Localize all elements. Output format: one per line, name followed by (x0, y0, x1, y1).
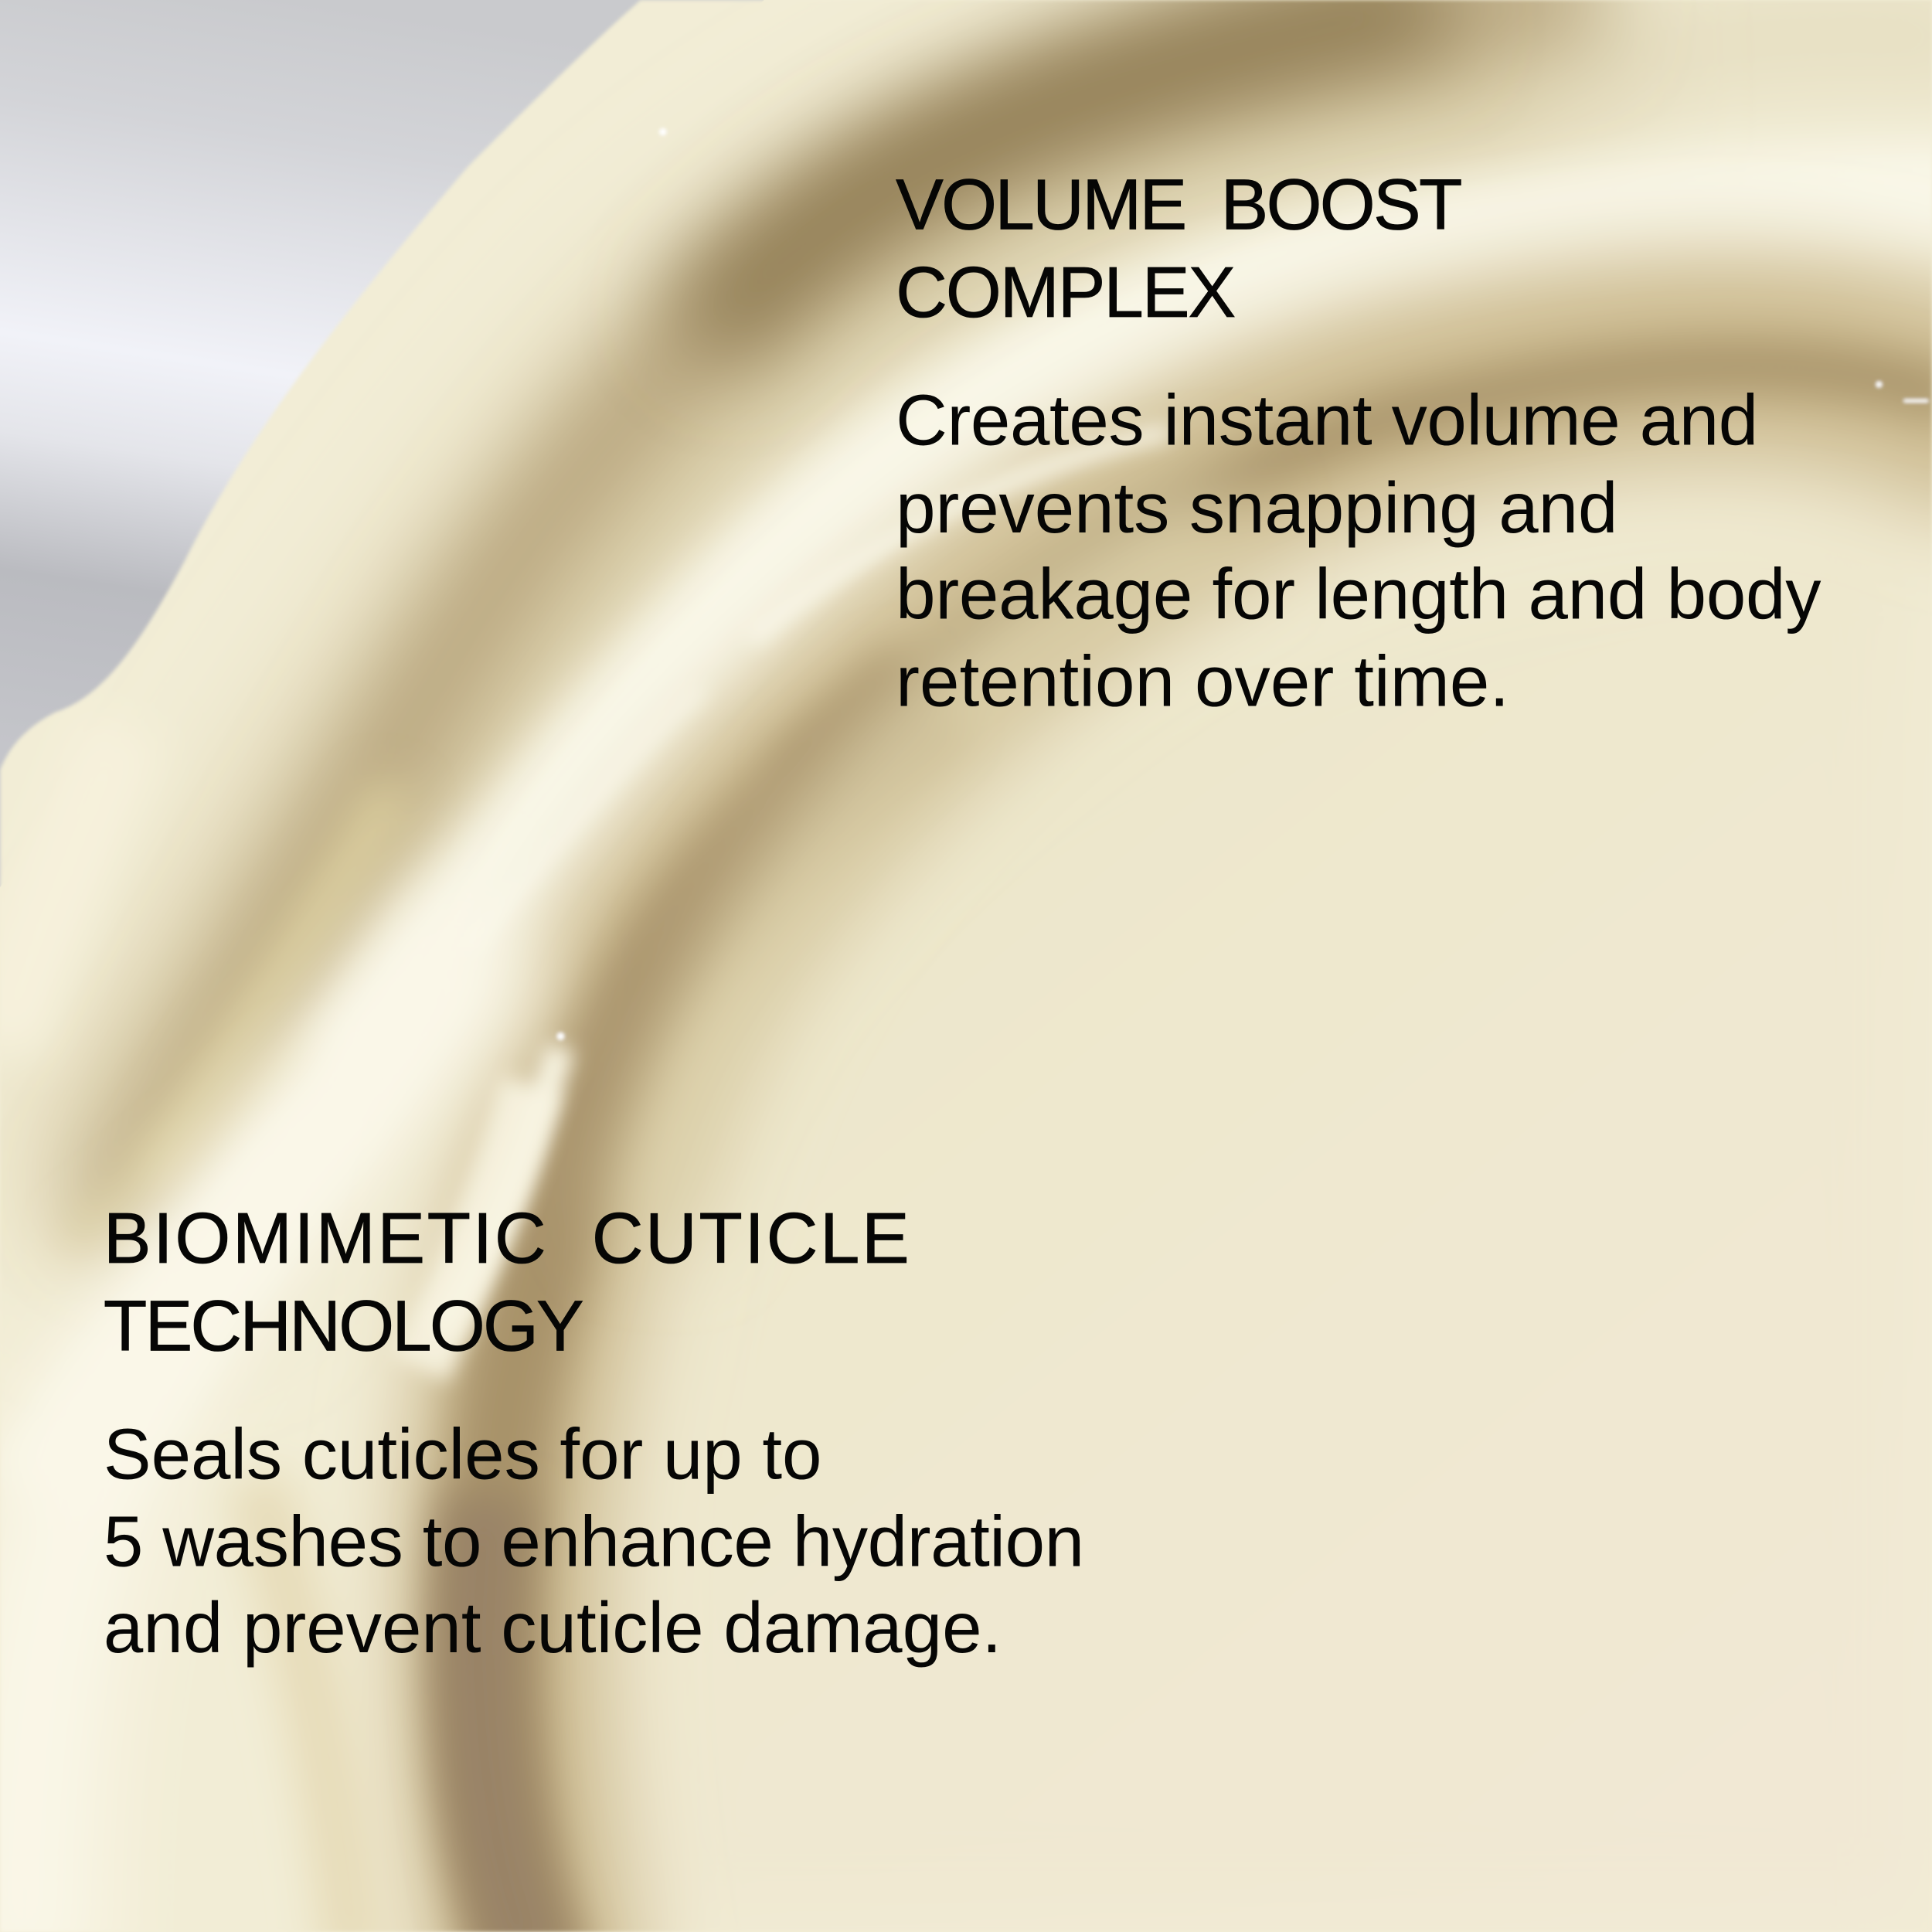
text block: Biomimetic Cuticle Technology (104, 1198, 1084, 1668)
body text: Volume Boost Complex: retention over time. (896, 641, 1509, 722)
body text: Biomimetic Cuticle Technology: Seals cuticles for up to (104, 1413, 821, 1494)
highlights: glossy specks (557, 128, 1928, 1040)
heading: Biomimetic Cuticle Technology (104, 1198, 910, 1366)
body text: Biomimetic Cuticle Technology (104, 1413, 1084, 1668)
body text: Biomimetic Cuticle Technology: 5 washes to enhance hydration (104, 1501, 1084, 1581)
text block: Volume Boost Complex (896, 165, 1821, 722)
heading: Volume Boost Complex: VOLUME BOOST (896, 165, 1463, 245)
body text: Volume Boost Complex: prevents snapping and (896, 468, 1617, 548)
body text: Biomimetic Cuticle Technology: and prevent cuticle damage. (104, 1587, 1002, 1668)
heading: Biomimetic Cuticle Technology: BIOMIMETIC CUTICLE (104, 1198, 910, 1278)
heading: Volume Boost Complex (896, 165, 1463, 332)
heading: Volume Boost Complex: COMPLEX (896, 252, 1236, 332)
heading: Biomimetic Cuticle Technology: TECHNOLOGY (104, 1285, 584, 1366)
body text: Volume Boost Complex: breakage for length and body (896, 553, 1821, 634)
body text: Volume Boost Complex (896, 380, 1821, 722)
body text: Volume Boost Complex: Creates instant volume and (896, 380, 1758, 461)
